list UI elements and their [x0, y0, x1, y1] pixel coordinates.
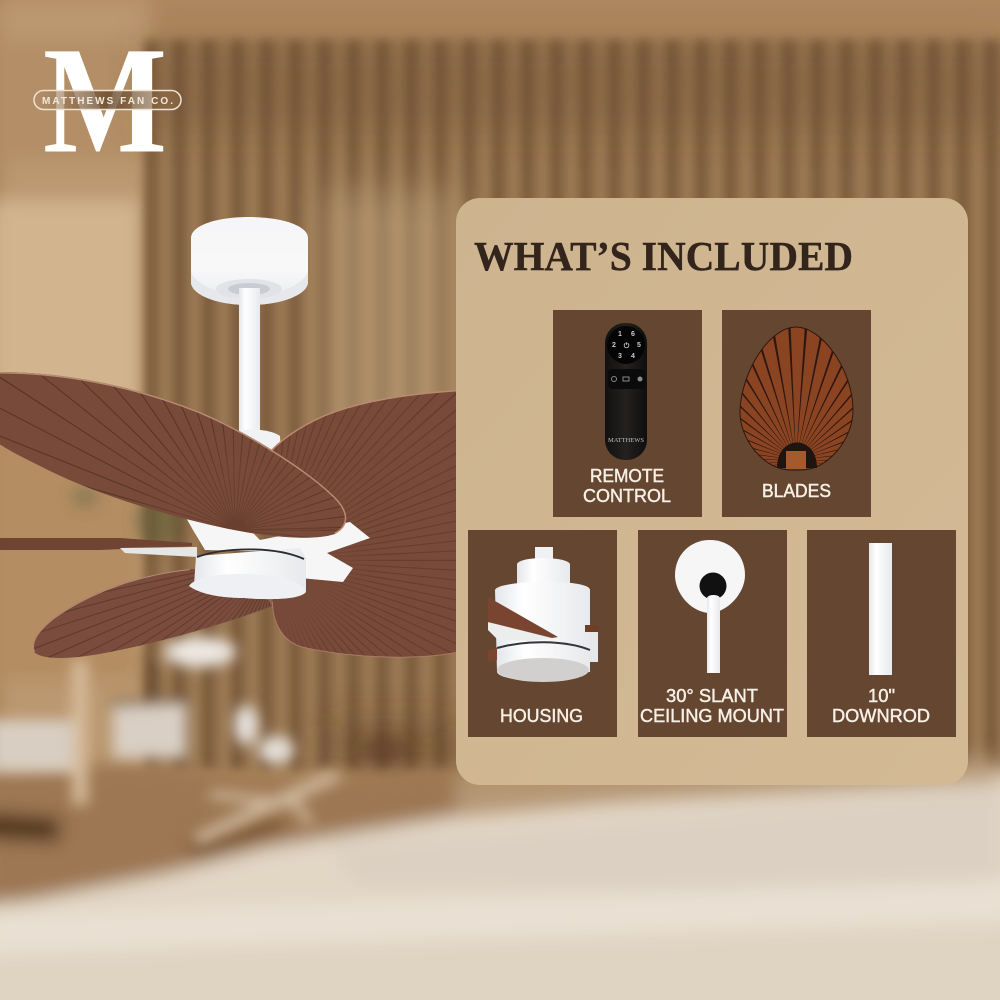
icon: remote: 6: [631, 331, 635, 338]
fan: edge-on blade: [0, 538, 192, 550]
card: housing: [468, 530, 617, 737]
icon: remote: MATTHEWS: [608, 437, 644, 444]
label: [583, 466, 671, 506]
fan: blade arms and housing: [120, 507, 370, 599]
label: 30° SLANT: [666, 686, 758, 706]
fan: top blade: [0, 372, 346, 538]
icon: remote: 2: [612, 342, 616, 349]
label: DOWNROD: [832, 706, 930, 726]
fan: right blade: [272, 390, 456, 658]
label: CEILING MOUNT: [640, 706, 784, 726]
icon: palm blade: [740, 326, 854, 470]
logo: Matthews Fan Co.: MATTHEWS FAN CO.: [42, 96, 173, 107]
icon: remote: ⏻: [624, 342, 630, 350]
card: blades: [722, 310, 871, 530]
icon: remote: 5: [637, 342, 641, 349]
card: remote control: [553, 310, 702, 517]
floor: [0, 755, 1000, 1000]
label: [832, 686, 930, 726]
fan illustration: [0, 217, 460, 710]
icon: remote: 1: [618, 331, 622, 338]
fan: downrod: [239, 288, 260, 433]
icon: remote: 3: [618, 353, 622, 360]
icon: remote: 4: [631, 353, 635, 360]
icon: housing: [488, 547, 599, 682]
blurred furniture: [0, 487, 410, 845]
label: CONTROL: [583, 486, 671, 506]
label: BLADES: [762, 481, 831, 501]
panel: what's included: [456, 198, 968, 785]
card: downrod: [807, 530, 956, 737]
label: [640, 686, 784, 726]
heading: WHAT’S INCLUDED: [474, 233, 853, 279]
fan: lower left blade: [33, 569, 272, 658]
label: 10": [868, 686, 895, 706]
icon: remote: [605, 323, 647, 460]
label: HOUSING: [500, 706, 583, 726]
card: slant ceiling mount: [638, 530, 787, 737]
fan: canopy: [191, 217, 308, 305]
label: REMOTE: [590, 466, 664, 486]
icon: ceiling mount: [675, 540, 745, 673]
icon: downrod: [869, 543, 892, 675]
fan: rod coupler: [232, 430, 282, 470]
logo: Matthews Fan Co.: M: [43, 16, 167, 186]
